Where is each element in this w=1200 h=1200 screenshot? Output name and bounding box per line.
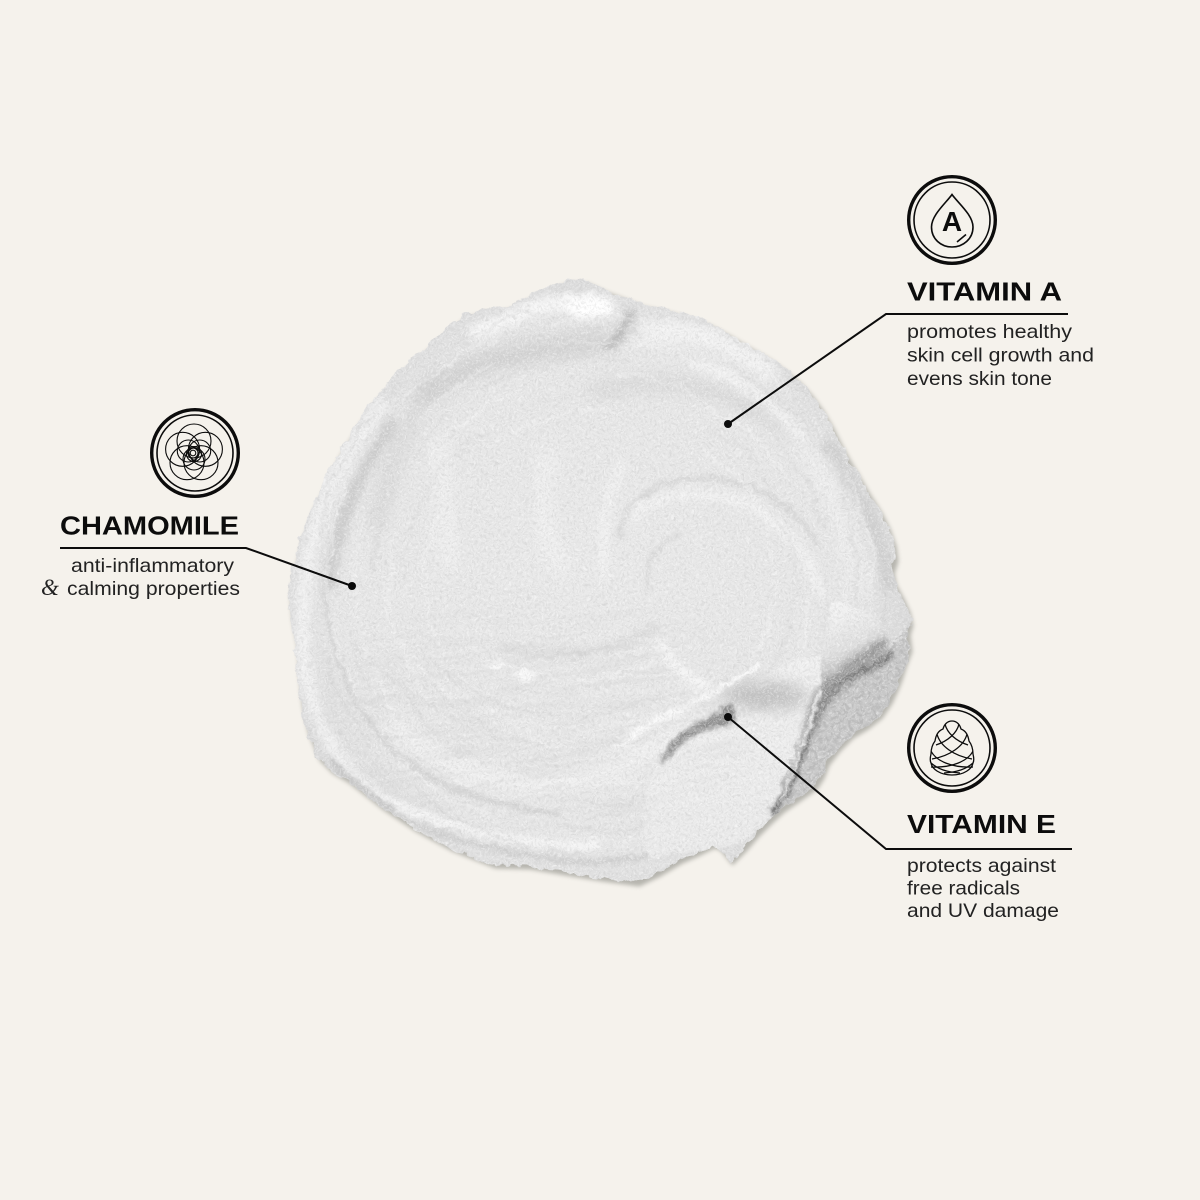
flap edge highlight — [782, 690, 821, 800]
surface grain — [288, 278, 910, 881]
heading: vitamin A: VITAMIN A — [907, 276, 1062, 306]
leader line: chamomile — [60, 548, 356, 590]
icon: vitamin A drop — [909, 177, 995, 263]
description: chamomile: & — [41, 575, 59, 600]
icon: vitamin A drop: A — [942, 206, 962, 237]
coarse rim grain — [772, 624, 913, 817]
icon: pine cone — [909, 705, 995, 791]
soft shadow in panel — [723, 682, 807, 710]
heading: vitamin E: VITAMIN E — [907, 809, 1056, 839]
leader line: vitamin E — [724, 713, 1072, 849]
bright lower panel — [644, 655, 822, 860]
dark fold band — [772, 652, 893, 815]
description: chamomile: anti-inflammatory — [71, 555, 234, 577]
rim beyond the fold — [775, 640, 911, 815]
callout: vitamin E — [724, 705, 1072, 922]
dark crease — [660, 704, 735, 762]
description: vitamin E: and UV damage — [907, 900, 1059, 922]
description: vitamin E: protects against — [907, 855, 1057, 877]
description: vitamin E — [907, 855, 1059, 922]
upper lobe — [820, 602, 870, 690]
top ridge — [470, 301, 610, 335]
leader line: vitamin A — [724, 314, 1068, 428]
right rim — [825, 440, 890, 590]
description: chamomile — [41, 555, 240, 600]
lower sweep shading — [390, 720, 690, 784]
description: vitamin A: evens skin tone — [907, 368, 1052, 390]
callout: vitamin A — [724, 177, 1094, 428]
description: vitamin A: promotes healthy — [907, 321, 1072, 343]
inner swirl — [619, 479, 819, 546]
description: chamomile: calming properties — [67, 578, 240, 600]
circular brush strokes — [315, 305, 885, 855]
description: vitamin E: free radicals — [907, 878, 1020, 900]
rim light and shadow bands — [303, 400, 420, 830]
callout: chamomile — [41, 410, 356, 600]
description: vitamin A: skin cell growth and — [907, 344, 1094, 366]
heading: chamomile: CHAMOMILE — [60, 510, 239, 540]
cream swatch — [288, 278, 916, 888]
icon: chamomile flower — [152, 410, 238, 496]
description: vitamin A — [907, 321, 1094, 390]
